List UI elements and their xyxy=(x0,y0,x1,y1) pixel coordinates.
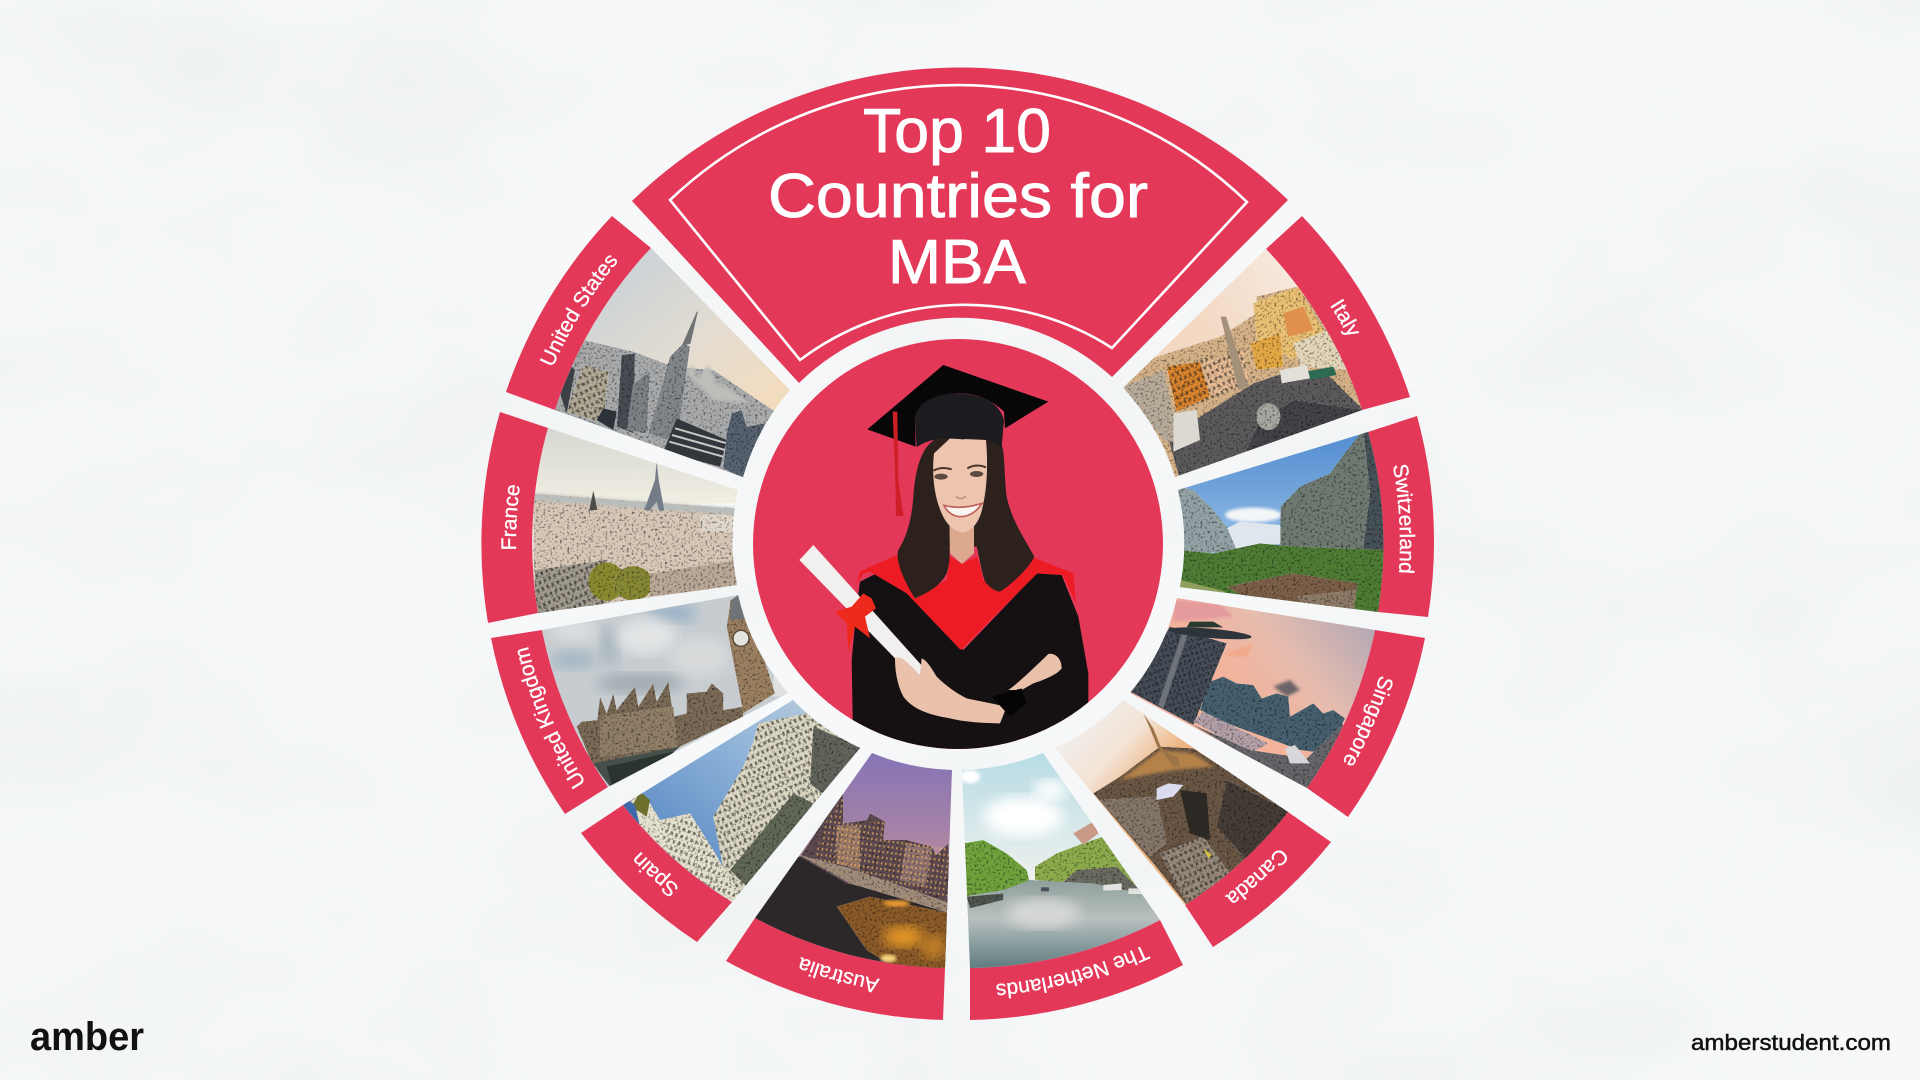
photo: Madrid street xyxy=(623,700,860,902)
neck xyxy=(949,526,974,564)
label: France: France xyxy=(501,485,520,549)
title: MBA xyxy=(888,228,1027,297)
photo: Swiss valley xyxy=(1178,432,1384,612)
hands and arms xyxy=(895,654,1062,723)
hair xyxy=(898,435,1034,598)
graduate illustration xyxy=(799,365,1088,753)
panel: Singapore xyxy=(1130,598,1425,817)
diploma xyxy=(799,545,921,675)
panel: Canada xyxy=(1056,700,1331,947)
gown xyxy=(852,570,1088,753)
photo: Rome piazza xyxy=(1123,249,1362,477)
title xyxy=(768,97,1148,297)
logo: amber: amber xyxy=(30,1015,144,1059)
eyes and brows xyxy=(933,466,986,499)
photo: London Parliament and Big Ben xyxy=(542,595,788,787)
panel: graduate circle xyxy=(753,339,1163,753)
photo: Toronto with CN Tower xyxy=(1056,700,1288,905)
title: Top 10 xyxy=(863,97,1051,166)
panel: The Netherlands xyxy=(962,753,1183,1020)
panel: title wedge xyxy=(632,68,1288,383)
panel: Switzerland xyxy=(1178,416,1434,617)
label: Italy: Italy xyxy=(1330,298,1360,335)
website link: amberstudent.com xyxy=(1691,1030,1891,1055)
panel: Italy xyxy=(1123,216,1410,477)
cap xyxy=(867,365,1048,447)
tassel xyxy=(893,412,903,516)
panel: United Kingdom xyxy=(491,595,788,814)
photo: Amsterdam canal xyxy=(962,753,1160,968)
hood xyxy=(856,555,1076,650)
panel: Australia xyxy=(726,753,952,1020)
label: Australia: Australia xyxy=(800,957,880,992)
label: The Netherlands: The Netherlands xyxy=(996,946,1150,998)
photo: New York skyline xyxy=(555,248,790,477)
label: United States: United States xyxy=(540,255,618,365)
label: United Kingdom: United Kingdom xyxy=(518,647,584,790)
panel: Spain xyxy=(581,700,860,942)
label: Spain: Spain xyxy=(634,852,678,896)
photo: Sydney at dusk xyxy=(755,753,952,968)
sleeve cuff xyxy=(992,688,1027,717)
photo: Paris with Eiffel Tower xyxy=(533,428,738,613)
label: Canada: Canada xyxy=(1224,850,1287,903)
panel: France xyxy=(481,412,738,623)
label: Singapore: Singapore xyxy=(1344,676,1393,766)
panel: United States xyxy=(506,216,790,477)
title: Countries for xyxy=(768,162,1148,231)
label: Switzerland: Switzerland xyxy=(1394,464,1416,573)
smile xyxy=(944,503,982,517)
photo: Singapore skyline xyxy=(1130,598,1375,788)
face xyxy=(933,438,987,532)
